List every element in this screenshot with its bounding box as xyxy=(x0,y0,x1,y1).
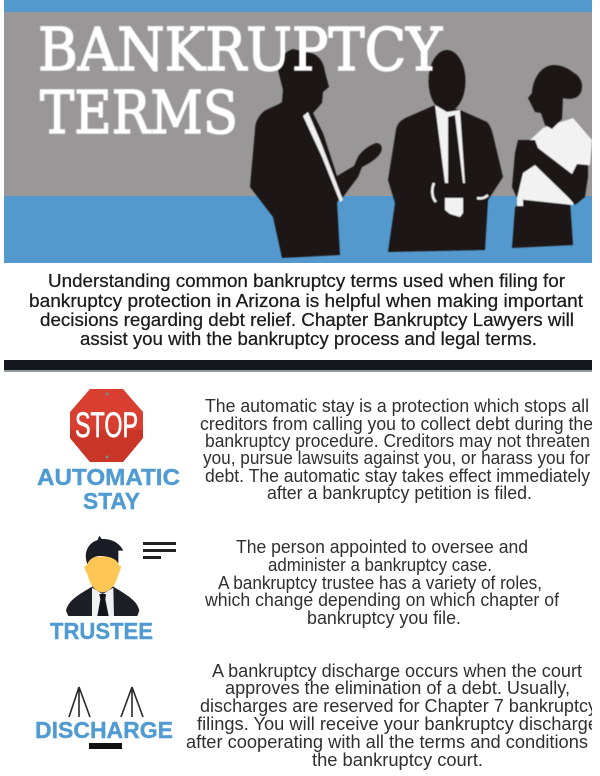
illustration: man in suit xyxy=(388,50,503,252)
text: trustee description: The person appointed to oversee and xyxy=(236,537,528,557)
heading: automatic stay: STAY xyxy=(83,488,140,514)
text: automatic stay description xyxy=(200,396,593,503)
text: discharge description: the bankruptcy court. xyxy=(312,750,483,770)
heading: discharge: DISCHARGE xyxy=(35,717,173,743)
title: BANKRUPTCY xyxy=(38,15,443,84)
heading: trustee: TRUSTEE xyxy=(50,618,153,644)
illustration: woman with blouse xyxy=(512,65,592,248)
panel: header banner xyxy=(4,0,592,263)
text: automatic stay description: debt. The automatic stay takes effect immediately xyxy=(205,466,590,486)
section divider xyxy=(4,360,592,372)
text: automatic stay description: after a bankruptcy petition is filed. xyxy=(267,483,532,503)
title: TERMS xyxy=(40,78,238,147)
text: discharge description: filings. You will receive your bankruptcy discharge xyxy=(197,714,598,734)
text: trustee description xyxy=(204,537,560,628)
intro paragraph: bankruptcy protection in Arizona is helpful when making important xyxy=(29,291,583,311)
icon: discharge arrows xyxy=(69,687,143,717)
icon: text lines xyxy=(143,542,176,559)
icon: trustee avatar xyxy=(66,536,139,616)
text: automatic stay description: you, pursue lawsuits against you, or harass you for xyxy=(203,448,590,468)
text: discharge description: after cooperating with all the terms and conditions xyxy=(186,732,588,752)
text: trustee description: bankruptcy you file. xyxy=(307,608,461,628)
text: trustee description: A bankruptcy trustee has a variety of roles, xyxy=(218,573,542,593)
heading: automatic stay: AUTOMATIC xyxy=(37,464,180,490)
text: trustee description: administer a bankruptcy case. xyxy=(268,555,492,575)
text: discharge description xyxy=(186,661,598,770)
intro paragraph: assist you with the bankruptcy process and legal terms. xyxy=(80,329,537,349)
intro paragraph: Understanding common bankruptcy terms used when filing for xyxy=(48,271,565,291)
text: discharge description: approves the elimination of a debt. Usually, xyxy=(225,678,570,698)
text: trustee description: which change depending on which chapter of xyxy=(204,590,560,610)
heading: automatic stay xyxy=(37,464,180,514)
icon: stop sign xyxy=(70,389,143,462)
text: automatic stay description: creditors from calling you to collect debt during the xyxy=(200,414,593,434)
title xyxy=(38,15,443,147)
text: discharge description: A bankruptcy discharge occurs when the court xyxy=(212,661,582,681)
text: automatic stay description: The automatic stay is a protection which stops all xyxy=(205,396,589,416)
icon: stop sign: STOP xyxy=(75,406,138,445)
icon: discharge bar xyxy=(89,743,122,749)
illustration: man in profile xyxy=(250,49,382,258)
text: discharge description: discharges are reserved for Chapter 7 bankruptcy xyxy=(200,696,597,716)
text: automatic stay description: bankruptcy procedure. Creditors may not threaten xyxy=(205,431,590,451)
intro paragraph: decisions regarding debt relief. Chapter Bankruptcy Lawyers will xyxy=(40,310,574,330)
intro paragraph xyxy=(29,271,583,349)
